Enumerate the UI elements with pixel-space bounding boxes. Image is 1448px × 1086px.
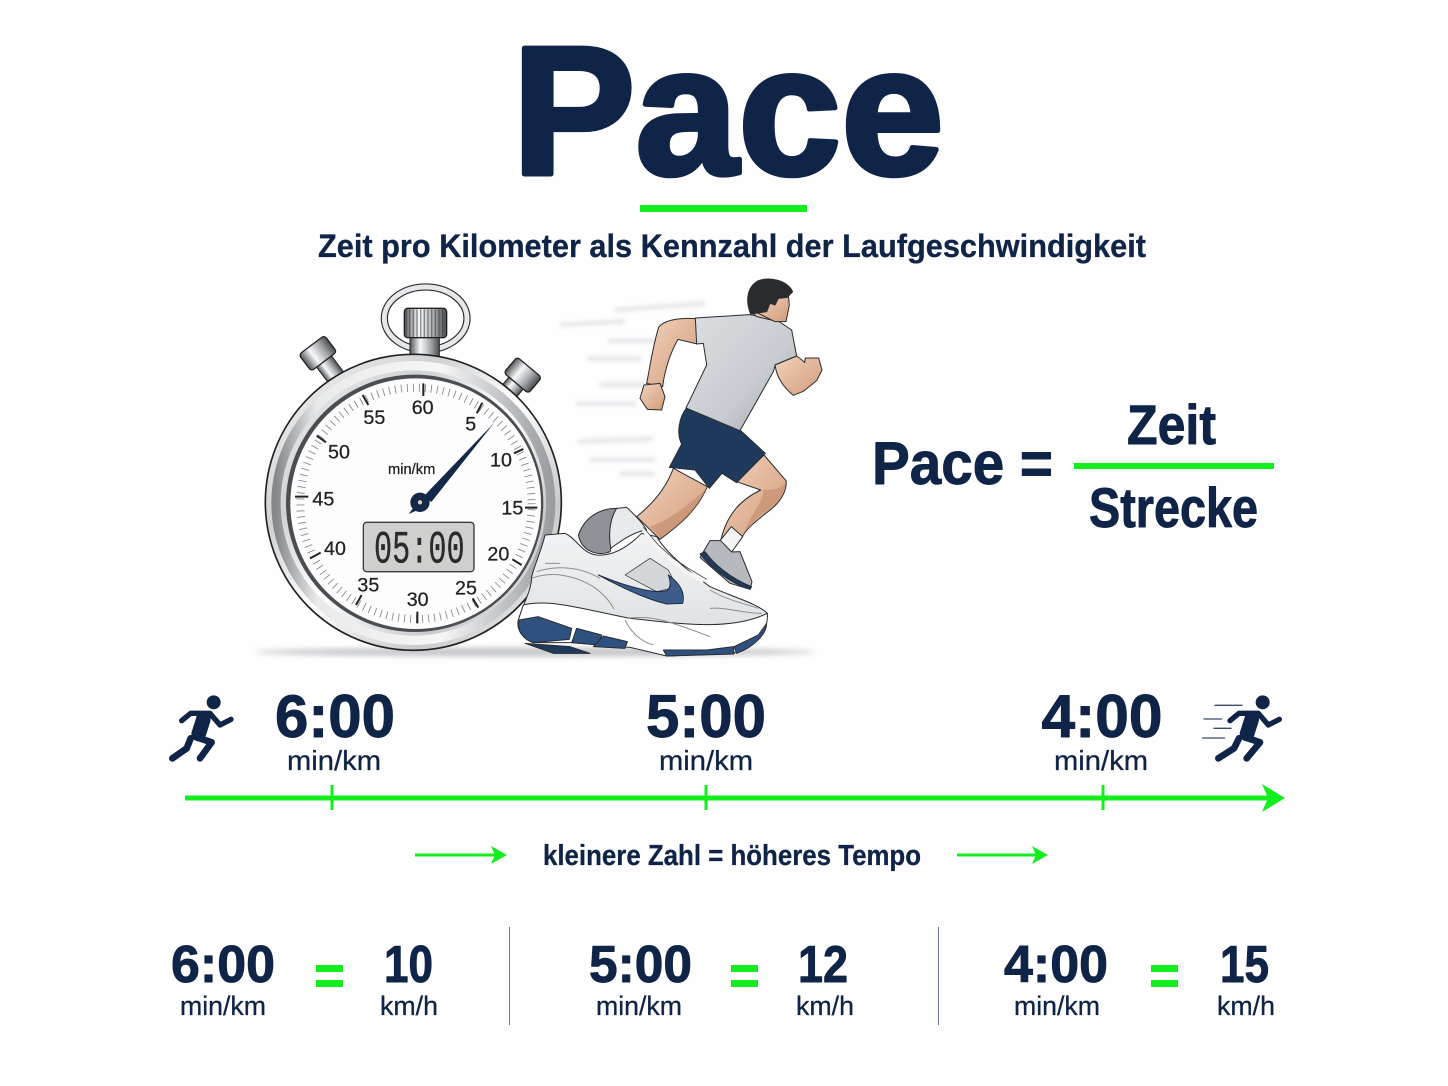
conversion: 6:00 = 10 <box>171 936 438 1021</box>
arrow: left tempo arrow <box>415 846 507 864</box>
dial numbers: 30 <box>407 589 429 611</box>
hand <box>424 423 494 502</box>
back fist <box>640 383 665 410</box>
collar opening <box>578 508 623 554</box>
face <box>757 293 789 322</box>
left pusher <box>299 335 348 387</box>
scale label: 4:00: min/km <box>1054 745 1148 776</box>
scale label: 5:00: min/km <box>659 745 753 776</box>
conversion: 6:00 = 10: 6:00 <box>171 936 275 994</box>
formula <box>872 393 1274 539</box>
dial numbers: 20 <box>487 544 509 566</box>
conversion: 4:00 = 15: 15 <box>1220 936 1269 994</box>
conversion: 5:00 = 12: min/km <box>596 991 682 1021</box>
denominator: Strecke <box>1089 476 1258 539</box>
crown knurl <box>404 308 447 338</box>
dial numbers: 55 <box>363 407 385 429</box>
front thigh <box>637 468 707 539</box>
divider <box>938 927 939 1025</box>
top ring <box>384 287 467 350</box>
formula left side: Pace = <box>872 430 1053 497</box>
sock <box>720 527 743 552</box>
shoe sole base <box>518 603 767 656</box>
conversion: 5:00 = 12 <box>589 936 854 1021</box>
motion lines <box>560 302 705 476</box>
conversion: 6:00 = 10: km/h <box>380 991 438 1021</box>
conversion: 4:00 = 15: 4:00 <box>1004 936 1108 994</box>
conversion: 5:00 = 12: km/h <box>796 991 854 1021</box>
rear leg <box>721 455 786 541</box>
dial numbers: 60 <box>412 397 434 419</box>
dial numbers: 5 <box>465 414 476 436</box>
dial numbers: 45 <box>312 489 334 511</box>
shorts <box>669 408 765 488</box>
rear shoe <box>700 541 752 589</box>
numerator: Zeit <box>1127 393 1216 456</box>
icon: fast runner <box>1203 695 1279 758</box>
icon: stopwatch: 05:00 <box>374 525 465 577</box>
laces <box>643 530 703 582</box>
shoe panel lines <box>532 563 762 645</box>
conversion: 4:00 = 15: min/km <box>1014 991 1100 1021</box>
ground shadow <box>255 648 815 656</box>
swoosh <box>598 575 683 604</box>
dial numbers: 35 <box>357 575 379 597</box>
conversion: 6:00 = 10: 10 <box>384 936 433 994</box>
fraction line <box>1074 463 1274 469</box>
hair <box>748 279 793 314</box>
dial numbers: min/km <box>388 462 435 478</box>
conversion: 5:00 = 12: 5:00 <box>589 936 692 994</box>
minute scale <box>300 388 532 619</box>
dial numbers: 50 <box>328 441 350 463</box>
conversion: 6:00 = 10: min/km <box>180 991 266 1021</box>
scale label: 6:00: min/km <box>287 745 381 776</box>
dial numbers: 10 <box>490 450 512 472</box>
icon: stopwatch <box>265 287 561 650</box>
scale label: 5:00: 5:00 <box>646 683 766 750</box>
dial numbers: 40 <box>324 538 346 560</box>
shirt <box>686 315 797 431</box>
back arm <box>647 318 697 387</box>
divider <box>509 927 510 1025</box>
illustration: runner <box>518 279 822 656</box>
case <box>265 354 561 650</box>
title underline <box>640 205 807 212</box>
scale label: 6:00: 6:00 <box>275 683 395 750</box>
title: Pace <box>512 8 944 213</box>
icon: slow runner <box>172 695 231 758</box>
pace scale arrow <box>185 784 1285 812</box>
right pusher <box>491 357 542 408</box>
front arm <box>775 356 822 395</box>
dial numbers: 25 <box>455 577 477 599</box>
tread blocks <box>519 617 572 643</box>
neck <box>752 310 778 322</box>
conversion: 4:00 = 15: km/h <box>1217 991 1275 1021</box>
lcd display <box>363 522 474 572</box>
tempo note: kleinere Zahl = höheres Tempo <box>543 840 921 872</box>
major ticks <box>295 383 537 623</box>
conversion: 5:00 = 12: 12 <box>798 936 848 994</box>
arrow: right tempo arrow <box>957 846 1048 864</box>
dial numbers: 15 <box>501 497 523 519</box>
scale label: 4:00: 4:00 <box>1042 683 1162 750</box>
mesh panel <box>625 558 677 592</box>
big shoe upper <box>518 533 767 646</box>
crown stem <box>410 335 439 358</box>
conversion: 4:00 = 15 <box>1004 936 1275 1021</box>
dial <box>290 378 541 629</box>
dial numbers <box>312 397 523 611</box>
subtitle: Zeit pro Kilometer als Kennzahl der Laufgeschwindigkeit <box>318 228 1146 264</box>
